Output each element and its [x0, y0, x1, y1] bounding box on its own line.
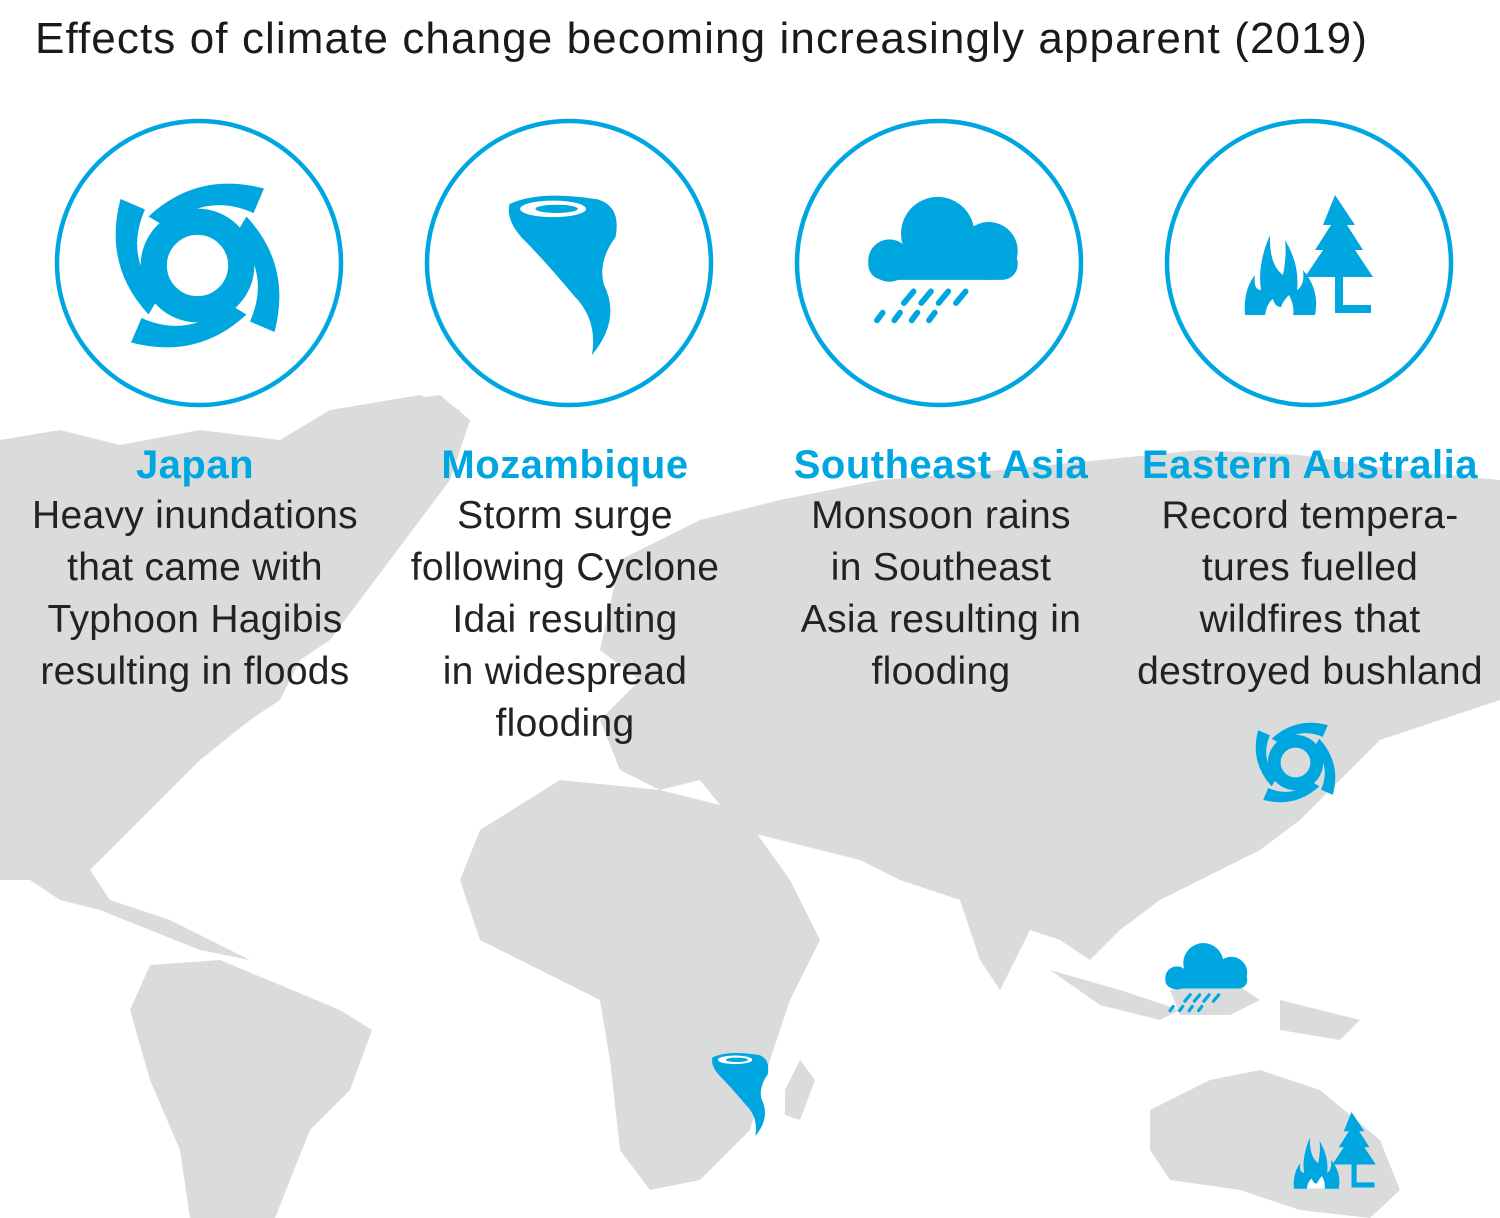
- text: Southeast Asia: Southeast Asia: [794, 443, 1088, 487]
- text: Mozambique: Idai resulting: [452, 598, 678, 641]
- icon: tornado: [427, 121, 711, 405]
- text: Eastern Australia: Eastern Australia: [1142, 443, 1478, 487]
- text: Eastern Australia: destroyed bushland: [1137, 650, 1483, 693]
- text: Japan: [32, 443, 358, 693]
- marker: rain Southeast Asia: [1165, 943, 1247, 1011]
- icon circles: [54, 118, 1454, 408]
- text: Eastern Australia: wildfires that: [1200, 598, 1420, 641]
- text: Mozambique: following Cyclone: [411, 546, 719, 589]
- text: Southeast Asia: in Southeast: [831, 546, 1051, 589]
- icon: typhoon: [57, 121, 341, 405]
- marker: fire Australia: [1294, 1112, 1376, 1189]
- text: Japan: resulting in floods: [40, 650, 350, 693]
- text: Southeast Asia: Monsoon rains: [811, 494, 1071, 537]
- text: Eastern Australia: [1137, 443, 1483, 693]
- text: Mozambique: flooding: [495, 702, 634, 745]
- text: Southeast Asia: [794, 443, 1088, 693]
- text: Southeast Asia: flooding: [871, 650, 1010, 693]
- marker: typhoon Japan: [1256, 723, 1335, 802]
- map markers: [712, 722, 1376, 1189]
- title: Effects of climate change becoming increasingly apparent (2019): [35, 14, 1368, 63]
- world map: [0, 395, 1500, 1218]
- text: Southeast Asia: Asia resulting in: [801, 598, 1081, 641]
- icon: rain cloud: [797, 121, 1081, 405]
- text: Japan: Typhoon Hagibis: [47, 598, 343, 641]
- text: Japan: that came with: [67, 546, 323, 589]
- text: Mozambique: in widespread: [443, 650, 687, 693]
- icon: fire and tree: [1167, 121, 1451, 405]
- marker: tornado Mozambique: [712, 1053, 768, 1136]
- text: Japan: Heavy inundations: [32, 494, 358, 537]
- text: Eastern Australia: tures fuelled: [1202, 546, 1418, 589]
- text: Mozambique: [411, 443, 719, 745]
- text: Japan: Japan: [136, 443, 254, 487]
- text: Mozambique: Storm surge: [457, 494, 673, 537]
- text: Mozambique: Mozambique: [441, 443, 689, 487]
- text: Eastern Australia: Record tempera-: [1161, 494, 1459, 537]
